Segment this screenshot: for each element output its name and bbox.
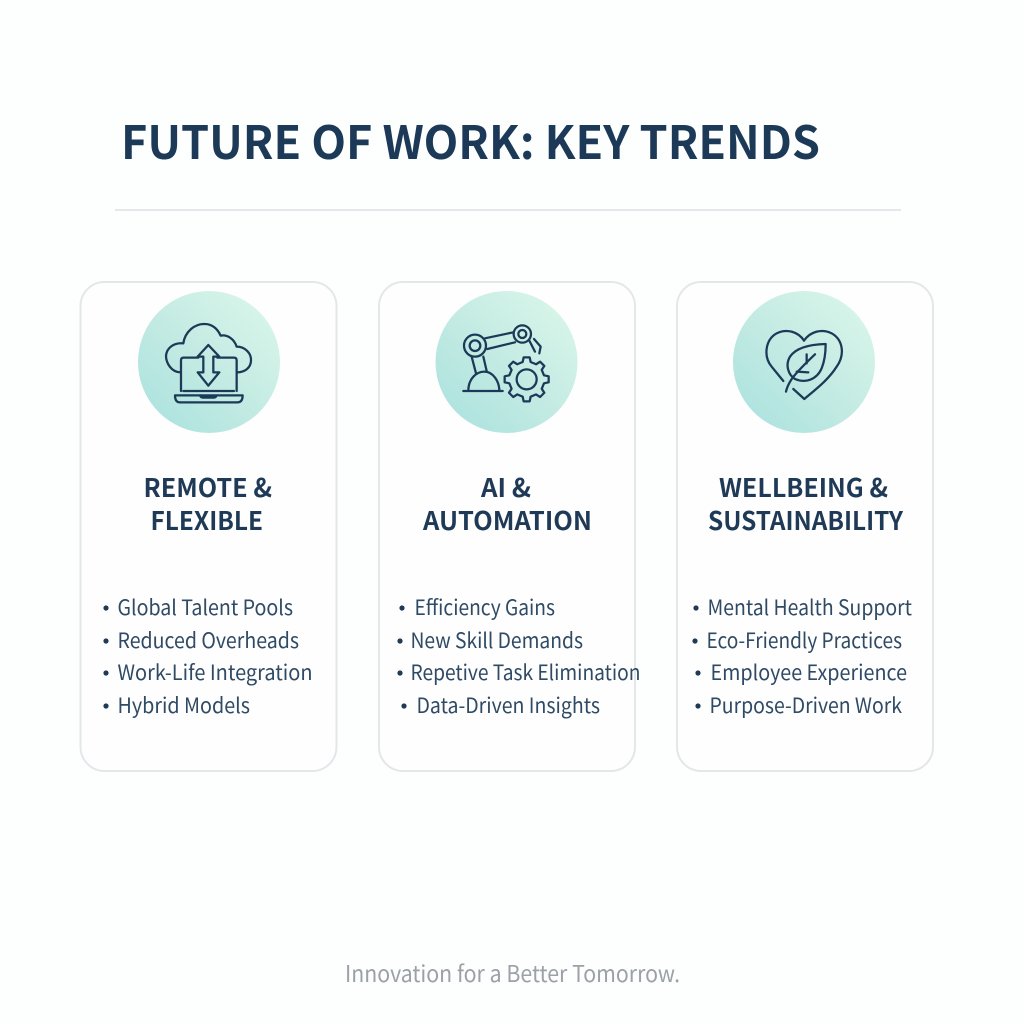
- heading: ai and automation: [422, 468, 592, 538]
- list: wellbeing and sustainability: Purpose-Driven Work: [710, 690, 902, 720]
- list: ai and automation: Data-Driven Insights: [416, 690, 600, 720]
- heading: wellbeing and sustainability: WELLBEING &: [719, 468, 888, 505]
- footer tagline: Innovation for a Better Tomorrow.: [345, 955, 680, 989]
- heading: ai and automation: AUTOMATION: [422, 501, 592, 538]
- list: wellbeing and sustainability: Mental Health Support: [708, 592, 912, 622]
- list: wellbeing and sustainability: Eco-Friendly Practices: [706, 625, 902, 655]
- list: remote and flexible: Reduced Overheads: [118, 625, 299, 655]
- list: remote and flexible: [103, 592, 313, 720]
- panel: wellbeing and sustainability: [677, 282, 933, 771]
- title: FUTURE OF WORK: KEY TRENDS: [121, 107, 820, 173]
- panel: remote and flexible: [80, 282, 336, 771]
- heading: wellbeing and sustainability: [708, 468, 903, 538]
- list: remote and flexible: Hybrid Models: [118, 690, 250, 720]
- heading: ai and automation: AI &: [480, 468, 531, 505]
- list: wellbeing and sustainability: [692, 592, 912, 720]
- heading: remote and flexible: FLEXIBLE: [150, 501, 263, 538]
- heading: remote and flexible: REMOTE &: [144, 468, 272, 505]
- list: wellbeing and sustainability: Employee Experience: [710, 657, 907, 687]
- list: ai and automation: Repetive Task Elimination: [410, 657, 640, 687]
- icon: heart and leaf: [733, 291, 875, 433]
- list: ai and automation: Efficiency Gains: [414, 592, 555, 622]
- icon: robot arm and gear: [436, 291, 578, 433]
- panel: ai and automation: [379, 282, 640, 771]
- list: remote and flexible: Work-Life Integration: [118, 657, 312, 687]
- icon: cloud and laptop: [138, 291, 280, 433]
- heading: wellbeing and sustainability: SUSTAINABILITY: [708, 501, 903, 538]
- heading: remote and flexible: [144, 468, 272, 538]
- list: ai and automation: [397, 592, 640, 720]
- list: remote and flexible: Global Talent Pools: [118, 592, 293, 622]
- list: ai and automation: New Skill Demands: [410, 625, 583, 655]
